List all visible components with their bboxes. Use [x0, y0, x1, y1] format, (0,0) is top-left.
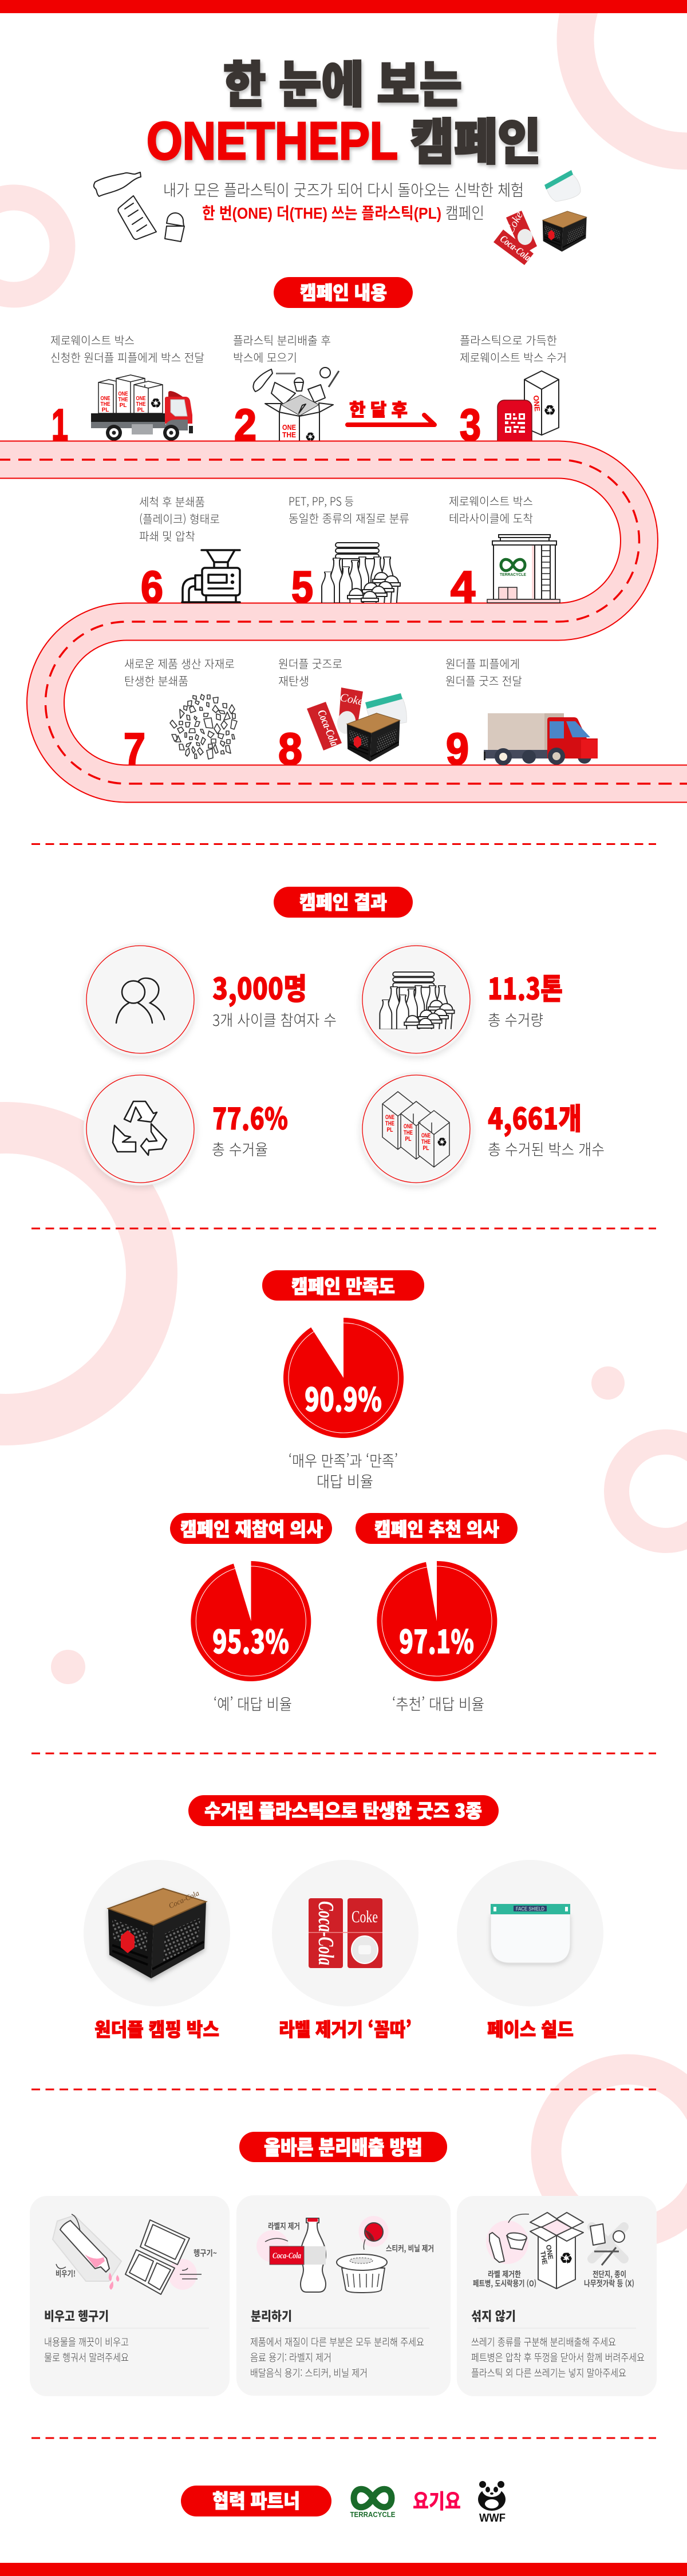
pie chart: satisfaction 90.9% [283, 1318, 404, 1438]
panel: do not mix [457, 2196, 657, 2396]
icon: delivery truck with boxes: PL [137, 407, 144, 413]
panel: boxes collected [360, 1072, 605, 1186]
panel: do not mix: ♻ [559, 2250, 573, 2267]
subtitle: 내가 모은 플라스틱이 굿즈가 되어 다시 돌아오는 신박한 체험 [163, 178, 524, 201]
panel: label remover: 라벨 제거기 ‘꼼따’ [279, 2014, 412, 2042]
top bar [0, 0, 687, 13]
step numbers row 3: 7 [124, 724, 145, 774]
panel: total weight [360, 943, 563, 1056]
pie chart: recommend 97.1%: 97.1% [399, 1617, 474, 1663]
panel: camping box: 원더플 캠핑 박스 [94, 2014, 219, 2042]
icon: red delivery truck [484, 713, 598, 765]
icon: delivery truck with boxes: PL [120, 402, 127, 409]
step numbers row 2: 4 [451, 562, 475, 612]
icon: delivery truck with boxes: ♻ [150, 397, 161, 411]
heading: partners: 협력 파트너 [212, 2486, 300, 2514]
step 8 text: 원더플 굿즈로 [278, 655, 342, 671]
step numbers row 1: 1 [52, 400, 68, 450]
step 4 text: 제로웨이스트 박스 [449, 492, 533, 509]
panel: boxes collected: PL [387, 1127, 393, 1133]
title [147, 45, 541, 173]
label and arrow: one month later: 한달후 [349, 396, 408, 421]
step numbers row 3 [124, 724, 469, 774]
panel: empty and rinse: 헹구기~ [194, 2247, 217, 2259]
heading: goods: 수거된 플라스틱으로 탄생한 굿즈 3종 [204, 1796, 482, 1823]
panel: do not mix: 플라스틱 외 다른 쓰레기는 넣지 말아주세요 [471, 2365, 626, 2380]
step 1 text: 신청한 원더플 피플에게 박스 전달 [50, 349, 204, 365]
icon: delivery truck with boxes: ONE [118, 391, 128, 397]
road [0, 460, 687, 784]
panel: boxes collected: THE [421, 1139, 431, 1145]
heading: campaign results [274, 887, 413, 918]
divider 5 [31, 2437, 656, 2439]
panel: label remover: Coke [352, 1907, 378, 1926]
icon: delivery truck with boxes: PL [102, 407, 109, 413]
pie chart: satisfaction 90.9%: 90.9% [305, 1374, 382, 1421]
panel: face shield [457, 1860, 603, 2042]
icon: upcycled goods: Coca-Cola [315, 708, 341, 748]
step 4 text: 테라사이클에 도착 [449, 509, 533, 526]
label and arrow: one month later [348, 396, 435, 425]
step numbers row 3: 8 [278, 724, 302, 774]
step 5 text: PET, PP, PS 등 [289, 492, 354, 509]
step 7 text: 새로운 제품 생산 자재로 [124, 655, 235, 671]
panel: do not mix: 쓰레기 종류를 구분해 분리배출해 주세요 [471, 2334, 616, 2349]
heading: satisfaction [262, 1270, 424, 1301]
title: 한 눈에 보는 [223, 45, 462, 116]
step 7 text [124, 655, 235, 689]
panel: empty and rinse: 비우기! [56, 2268, 76, 2279]
panel: boxes collected: THE [404, 1129, 413, 1136]
icon: shredding machine [182, 550, 240, 602]
pie chart: recommend 97.1% [377, 1561, 497, 1681]
step 3 text [460, 331, 567, 365]
panel: do not mix: 섞지 않기 [471, 2306, 516, 2325]
panel: do not mix: 페트병, 도시락용기 (O) [473, 2278, 536, 2289]
icon: delivery truck with boxes: THE [101, 401, 110, 408]
step 7 text: 탄생한 분쇄품 [124, 672, 188, 689]
step 3 text: 제로웨이스트 박스 수거 [460, 349, 567, 365]
step numbers row 1 [52, 400, 481, 450]
step numbers row 3: 9 [446, 724, 469, 774]
panel: boxes collected: 총 수거된 박스 개수 [488, 1137, 605, 1160]
subtitle: 캠페인 [445, 201, 484, 224]
caption: satisfaction [289, 1449, 398, 1492]
panel: camping box [84, 1860, 230, 2042]
step 5 text: 동일한 종류의 재질로 분류 [289, 509, 409, 526]
panel: recovery rate: 77.6% [212, 1095, 288, 1138]
icon: Terracycle building [487, 535, 560, 603]
heading: recycling method: 올바른 분리배출 방법 [264, 2132, 423, 2161]
icon: hero goods: Coke [503, 210, 526, 236]
divider 2 [31, 1227, 656, 1230]
panel: boxes collected: PL [405, 1136, 412, 1143]
caption: satisfaction: 대답 비율 [317, 1469, 373, 1492]
icon: hero goods [493, 170, 587, 265]
panel: camping box: Coca-Cola [167, 1888, 201, 1910]
step 6 text: (플레이크) 형태로 [139, 510, 220, 527]
step 2 text: 플라스틱 분리배출 후 [233, 331, 331, 348]
step numbers row 2 [141, 562, 475, 612]
panel: separate: 제품에서 재질이 다른 부분은 모두 분리해 주세요 [250, 2334, 424, 2349]
subtitle: 한 번(ONE) 더(THE) 쓰는 플라스틱(PL) [202, 204, 441, 222]
panel: boxes collected: ONE [404, 1123, 413, 1130]
panel: face shield: 페이스 쉴드 [487, 2014, 574, 2042]
bottom bar [0, 2563, 687, 2576]
panel: total weight: 11.3톤 [488, 965, 563, 1008]
icon: delivery truck with boxes: THE [118, 397, 128, 403]
icon: delivery truck with boxes [91, 375, 193, 441]
step 1 text [50, 331, 204, 365]
panel: face shield: FACE SHIELD [516, 1906, 544, 1912]
panel: recovery rate [84, 1072, 288, 1186]
panel: do not mix: ONE [544, 2244, 555, 2260]
step 4 text [449, 492, 533, 526]
step 3 text: 플라스틱으로 가득한 [460, 331, 557, 348]
panel: label remover: Coca-Cola [314, 1901, 338, 1965]
panel: participants: 3,000명 [212, 965, 307, 1008]
step 9 text: 원더플 굿즈 전달 [445, 672, 522, 689]
pie chart: rejoin 95.3% [191, 1561, 311, 1681]
panel: recovery rate: 총 수거율 [212, 1137, 268, 1160]
icon: delivery truck with boxes: ONE [101, 396, 110, 402]
logo: Terracycle: TERRACYCLE [350, 2510, 396, 2519]
step numbers row 2: 6 [141, 562, 163, 612]
panel: participants [84, 943, 337, 1056]
heading: satisfaction: 캠페인 만족도 [291, 1271, 395, 1299]
panel: do not mix: 페트병은 압착 후 뚜껑을 닫아서 함께 버려주세요 [471, 2350, 645, 2365]
caption: recommend: ‘추천’ 대답 비율 [392, 1692, 484, 1714]
icon: delivery truck with boxes: THE [136, 401, 146, 408]
step numbers row 1: 3 [460, 400, 481, 450]
icon: box and phone QR: ♻ [543, 402, 556, 418]
divider 4 [31, 2088, 656, 2091]
step numbers row 1: 2 [234, 400, 256, 450]
subtitle [163, 178, 524, 224]
panel: separate: 음료 용기: 라벨지 제거 [250, 2350, 331, 2365]
icon: box collecting plastics: THE [282, 430, 296, 439]
step 2 text [233, 331, 331, 365]
panel: separate: 스티커, 비닐 제거 [386, 2243, 434, 2254]
icon: box collecting plastics: ONE [282, 423, 296, 432]
step 1 text: 제로웨이스트 박스 [50, 331, 135, 348]
heading: recommend intent: 캠페인 추천 의사 [374, 1514, 499, 1542]
caption: satisfaction: ‘매우 만족’과 ‘만족’ [289, 1449, 398, 1471]
step 9 text: 원더플 피플에게 [445, 655, 520, 671]
panel: do not mix: THE [539, 2250, 549, 2265]
panel: empty and rinse: 비우고 헹구기 [44, 2306, 109, 2325]
title: ONETHEPL [147, 111, 398, 171]
heading: partners [181, 2486, 331, 2516]
icon: plastic flakes [170, 694, 237, 759]
caption: rejoin: ‘예’ 대답 비율 [214, 1692, 292, 1714]
step numbers row 2: 5 [291, 562, 313, 612]
panel: separate [236, 2195, 451, 2396]
panel: do not mix: 라벨 제거한 [488, 2269, 521, 2280]
icon: plastic pile [322, 543, 400, 625]
icon: box collecting plastics: ♻ [305, 430, 315, 444]
icon: box and phone QR: ONE [532, 395, 542, 412]
logo: Terracycle [350, 2489, 396, 2519]
heading: campaign results: 캠페인 결과 [299, 887, 387, 915]
step 2 text: 박스에 모으기 [233, 349, 297, 365]
step 6 text [139, 493, 220, 544]
step 9 text [445, 655, 522, 689]
step 6 text: 세척 후 분쇄품 [139, 493, 205, 509]
panel: boxes collected: ONE [385, 1114, 394, 1121]
logo: WWF: WWF [479, 2512, 506, 2524]
panel: separate: 분리하기 [251, 2306, 292, 2325]
icon: Terracycle building: TERRACYCLE [500, 572, 526, 577]
icon: box and phone QR [498, 371, 559, 452]
heading: campaign content: 캠페인 내용 [300, 278, 387, 305]
logo: Yogiyo: 요기요 [413, 2485, 461, 2515]
panel: boxes collected: 4,661개 [488, 1095, 582, 1138]
step 6 text: 파쇄 및 압착 [139, 527, 195, 544]
panel: label remover [272, 1860, 418, 2042]
title: 캠페인 [410, 102, 541, 173]
logo: WWF [478, 2481, 506, 2524]
heading: campaign content [274, 277, 413, 308]
step 5 text [289, 492, 409, 526]
panel: do not mix: 나무젓가락 등 (X) [584, 2278, 634, 2289]
heading: rejoin intent: 캠페인 재참여 의사 [180, 1514, 323, 1542]
pie chart: rejoin 95.3%: 95.3% [212, 1617, 289, 1663]
panel: empty and rinse: 물로 헹궈서 말려주세요 [44, 2350, 129, 2365]
panel: empty and rinse [30, 2196, 230, 2396]
panel: empty and rinse: 내용물을 깨끗이 비우고 [44, 2334, 129, 2349]
step 8 text [278, 655, 342, 689]
icon: hero plastics line art [94, 172, 184, 242]
panel: separate: 라벨지 제거 [268, 2221, 300, 2232]
step 8 text: 재탄생 [278, 672, 309, 689]
icon: box collecting plastics [253, 368, 339, 452]
icon: upcycled goods [307, 688, 406, 762]
icon: upcycled goods: Coke [339, 691, 365, 708]
panel: separate: 배달음식 용기: 스티커, 비닐 제거 [250, 2365, 368, 2380]
panel: boxes collected: ONE [421, 1132, 431, 1139]
icon: delivery truck with boxes: ONE [136, 396, 146, 402]
icon: hero goods: Coca-Cola [498, 233, 533, 263]
divider 1 [31, 843, 656, 845]
panel: boxes collected: THE [385, 1120, 394, 1127]
panel: total weight: 총 수거량 [488, 1008, 543, 1030]
panel: boxes collected: ♻ [437, 1135, 447, 1149]
panel: do not mix: 전단지, 종이 [593, 2269, 626, 2280]
divider 3 [31, 1753, 656, 1754]
panel: separate: Coca-Cola [273, 2251, 301, 2261]
panel: participants: 3개 사이클 참여자 수 [212, 1008, 337, 1030]
panel: boxes collected: PL [423, 1145, 429, 1152]
